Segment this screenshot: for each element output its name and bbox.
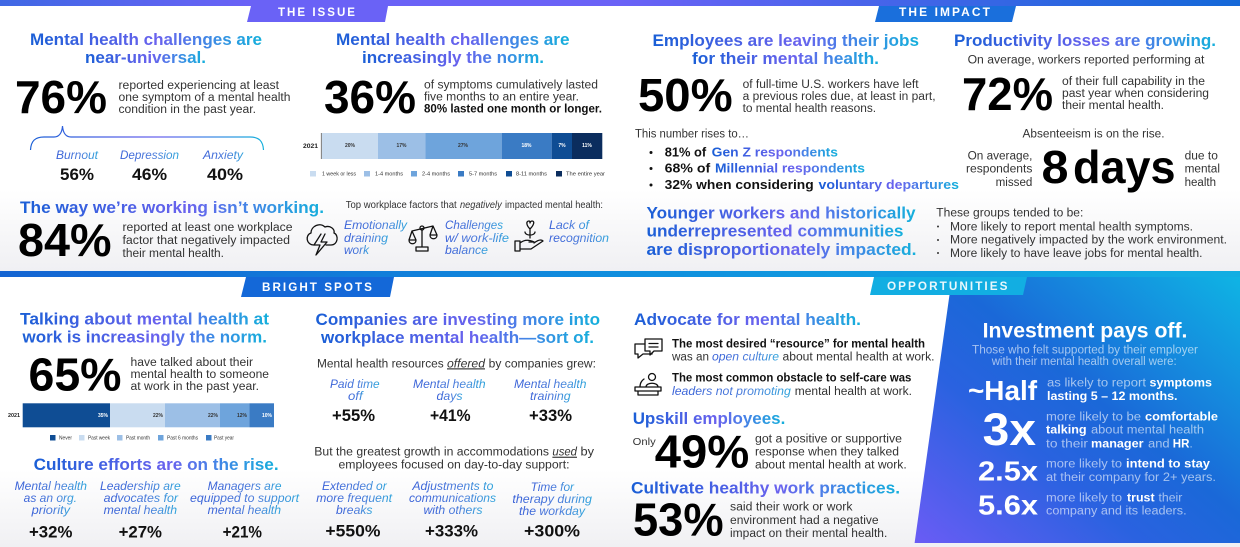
stat: 50% [638, 69, 936, 121]
factor: emotionally draining work: Emotionally [344, 220, 408, 232]
stacked bar chart: talking frequency: 10% [262, 413, 273, 419]
accommodation stat columns: with others [424, 505, 483, 517]
heading: increasingly the norm [336, 30, 570, 67]
stat: 2.5x: 2.5x [978, 456, 1038, 487]
stacked bar chart: talking frequency: Past 6 months [167, 436, 198, 442]
tab: opportunities: OPPORTUNITIES [887, 281, 1010, 293]
stacked bar chart: symptom durations: 11% [582, 143, 592, 149]
heading: companies investing [316, 310, 600, 347]
stat: 76%: one symptom of a mental health [118, 92, 290, 104]
stat: 2.5x: at their company for 2+ years. [1046, 472, 1216, 484]
stat: 72%: of their full capability in the [1062, 76, 1205, 88]
stacked bar chart: talking frequency: 22% [153, 413, 164, 419]
culture stat columns: Managers are [208, 481, 282, 493]
accommodation stat columns: Extended or [322, 481, 388, 493]
stacked bar chart: talking frequency: 2021 [8, 413, 20, 419]
stat: 76%: condition in the past year. [118, 104, 256, 116]
stat: 49%: response when they talked [755, 447, 899, 459]
text: open culture: The most desired “resource” for mental health [672, 338, 925, 350]
factor: emotionally draining work: work [344, 245, 370, 257]
heading: near-universal [30, 30, 262, 67]
heading: upskill: Upskill employees. [633, 409, 785, 428]
heading: talking about mental health [20, 309, 269, 346]
stacked bar chart: talking frequency [8, 403, 274, 442]
tab: the impact: THE IMPACT [899, 7, 992, 19]
text: open culture: about mental health at work. [782, 352, 934, 364]
accommodation stat columns: Time for [531, 482, 575, 494]
symptom breakdown: 46% [132, 166, 167, 184]
symptom breakdown: 40% [207, 166, 243, 184]
factor: lack of recognition: recognition [549, 233, 609, 245]
stat: 84% [18, 214, 292, 266]
stat: 76%: 76% [15, 71, 107, 123]
stat: 5.6x: more likely to [1046, 492, 1122, 504]
stat: 3x: . [1190, 438, 1193, 450]
stat: half: lasting 5 – 12 months. [1047, 391, 1178, 403]
stat: 50%: a previous roles due, at least in part, [743, 91, 936, 103]
stacked bar chart: symptom durations: 17% [396, 143, 407, 149]
heading: talking about mental health: Talking about mental health at [20, 309, 269, 328]
bullet list: demographics: 68% of [665, 161, 711, 176]
symptom breakdown: Anxiety [202, 150, 244, 162]
brace [30, 126, 264, 150]
stat: 72%: past year when considering [1062, 88, 1209, 100]
heading: younger workers [646, 204, 916, 259]
stat: 53%: said their work or work [730, 502, 853, 514]
accommodation stat columns: Adjustments to [411, 481, 494, 493]
tab: the issue [247, 6, 388, 22]
stacked bar chart: symptom durations: 5-7 months [469, 172, 498, 178]
bullet list: group tendencies [936, 208, 1227, 260]
stat: 76%: reported experiencing at least [118, 80, 280, 92]
bullet list: demographics: Gen Z respondents [712, 145, 838, 160]
factor: emotionally draining work [344, 220, 408, 257]
heading: productivity [954, 31, 1216, 66]
stacked bar chart: symptom durations [303, 133, 605, 178]
heading: near-universal: near-universal. [85, 48, 206, 67]
bullet list: group tendencies: More likely to have leave jobs for mental health. [950, 248, 1202, 260]
stacked bar chart: symptom durations: The entire year [566, 172, 605, 178]
stacked bar chart: symptom durations: 8-11 months [516, 172, 548, 178]
culture stat columns: mental health [104, 505, 177, 517]
stacked bar chart: talking frequency: 35% [98, 413, 109, 419]
text: resources offered: offered [447, 358, 486, 370]
symptom breakdown [56, 150, 244, 184]
culture stat columns: as an org. [24, 493, 77, 505]
heading: companies investing: Companies are investing more into [316, 310, 600, 329]
culture stat columns: Mental health [15, 481, 87, 493]
resource stat columns: training [530, 391, 571, 403]
heading: increasingly the norm: Mental health challenges are [336, 30, 570, 49]
stat: 49%: got a positive or supportive [755, 434, 902, 446]
text: accommodations used: But the greatest growth in accommodations [314, 447, 549, 459]
stat: half: ~Half [968, 375, 1038, 406]
bullet list: demographics: 32% when considering [665, 177, 814, 192]
heading: culture efforts: Culture efforts are on the rise. [34, 455, 279, 474]
culture stat columns [15, 481, 300, 542]
stat: 53%: 53% [633, 494, 724, 546]
text: leaders not promoting: The most common obstacle to self-care was [672, 373, 911, 385]
icon: balance scale [409, 226, 437, 251]
stat: 65%: have talked about their [130, 357, 253, 369]
stat: 72% [962, 68, 1209, 120]
resource stat columns: Mental health [514, 379, 586, 391]
stat: 53%: impact on their mental health. [730, 528, 887, 540]
tab: the impact [875, 6, 1016, 22]
heading: productivity: Productivity losses are growing. [954, 31, 1216, 50]
accommodation stat columns: breaks [336, 505, 373, 517]
heading: near-universal: Mental health challenges are [30, 30, 262, 49]
stat: 8 days [966, 141, 1220, 193]
stat: 2.5x: intend to stay [1126, 459, 1211, 471]
heading: talking about mental health: work is increasingly the norm. [22, 327, 267, 346]
panel: investment pays off [870, 277, 1240, 543]
resource stat columns: Paid time [330, 379, 380, 391]
stacked bar chart: symptom durations: 27% [458, 143, 469, 149]
resource stat columns: +41% [430, 407, 471, 425]
stat: half [968, 375, 1212, 406]
text: leaders not promoting [672, 373, 912, 398]
stat: 76% [15, 71, 290, 123]
stat: 36%: 80% lasted one month or longer. [424, 104, 602, 116]
stacked bar chart: symptom durations: 1 week or less [322, 172, 357, 178]
stat: 65%: at work in the past year. [130, 381, 259, 393]
text: leaders not promoting: leaders not promoting [672, 386, 791, 398]
accommodation stat columns: more frequent [316, 493, 393, 505]
text: number rises: This number rises to… [635, 129, 749, 141]
factor: lack of recognition: Lack of [549, 220, 591, 232]
heading: working: The way we’re working isn’t working. [20, 198, 324, 217]
heading: advocate: Advocate for mental health. [634, 310, 861, 329]
factor: challenges with work-life balance: Challenges [445, 220, 503, 232]
factor: challenges with work-life balance: w/ work-life [445, 233, 509, 245]
tab: bright spots [241, 277, 394, 297]
stat: 72%: 72% [962, 68, 1053, 120]
stat: 3x: manager [1091, 438, 1144, 450]
heading: cultivate: Cultivate healthy work practices. [631, 478, 900, 497]
heading: leaving jobs: Employees are leaving their jobs [652, 31, 919, 50]
culture stat columns: priority [30, 505, 71, 517]
stacked bar chart: symptom durations: 2021 [303, 143, 318, 150]
bullet list: group tendencies: These groups tended to be: [936, 208, 1083, 220]
resource stat columns: Mental health [413, 379, 486, 391]
heading: younger workers: underrepresented communities [646, 222, 904, 241]
text: leaders not promoting: mental health at work. [795, 386, 912, 398]
tab: the issue: THE ISSUE [278, 7, 357, 19]
text: top workplace factors: negatively [460, 200, 503, 211]
resource stat columns: +55% [332, 407, 375, 425]
text: top workplace factors: impacted mental health: [505, 200, 603, 211]
text: accommodations used [314, 447, 594, 472]
icon: chat bubbles [635, 339, 662, 358]
text: open culture [671, 338, 934, 364]
panel: bright spots [8, 309, 600, 542]
stacked bar chart: talking frequency: Past month [126, 436, 150, 442]
accommodation stat columns: +300% [524, 523, 580, 541]
accommodation stat columns: +550% [325, 523, 381, 541]
text: accommodations used: by [580, 447, 594, 459]
culture stat columns: +32% [29, 524, 73, 542]
stat: 36%: 36% [324, 71, 416, 123]
stat: 3x: talking [1046, 425, 1087, 437]
accommodation stat columns: +333% [425, 523, 478, 541]
stat: 8 days: due to [1185, 150, 1218, 162]
stat: 5.6x: 5.6x [978, 489, 1038, 520]
text: accommodations used: used [552, 447, 578, 459]
bullet list: demographics: Millennial respondents [715, 161, 865, 176]
stat: half: symptoms [1150, 378, 1212, 390]
text: resources offered [317, 358, 596, 370]
text: top workplace factors [346, 200, 603, 211]
heading: investment pays off: Investment pays off. [983, 320, 1187, 343]
stat: 65%: mental health to someone [130, 369, 269, 381]
heading: younger workers: Younger workers and historically [646, 204, 916, 223]
symptom breakdown: 56% [60, 166, 94, 184]
stat: 8 days: respondents [966, 164, 1033, 176]
text: accommodations used: employees focused on day-to-day support: [338, 460, 570, 472]
heading: leaving jobs [652, 31, 919, 68]
stat: 5.6x: company and its leaders. [1046, 505, 1187, 517]
text: open culture: was an [671, 352, 709, 364]
stacked bar chart: talking frequency: Never [59, 436, 72, 442]
stat: 50%: 50% [638, 69, 733, 121]
stat: 49%: Only [633, 436, 656, 448]
stat: 5.6x: their [1158, 492, 1182, 504]
stat: 49%: 49% [655, 426, 749, 478]
resource stat columns [330, 379, 586, 425]
stacked bar chart: symptom durations: 7% [558, 143, 566, 149]
text: resources offered: Mental health resources [317, 358, 444, 370]
text: supported employees: with their mental health overall were: [991, 356, 1177, 368]
text: absenteeism: Absenteeism is on the rise. [1022, 129, 1164, 141]
culture stat columns: +27% [119, 524, 162, 542]
text: resources offered: by companies grew: [489, 358, 596, 370]
stat: 84%: their mental health. [122, 248, 224, 260]
stat: 3x: HR [1173, 438, 1190, 450]
culture stat columns: mental health [208, 505, 281, 517]
stat: 5.6x [978, 489, 1187, 520]
accommodation stat columns: the workday [519, 506, 586, 518]
stat: 5.6x: trust [1127, 492, 1155, 504]
bullet list: demographics [650, 145, 959, 192]
symptom breakdown: Burnout [56, 150, 99, 162]
stat: 49%: about mental health at work. [755, 460, 907, 472]
heading: increasingly the norm: increasingly the norm. [362, 48, 544, 67]
stacked bar chart: symptom durations: 2-4 months [422, 172, 451, 178]
accommodation stat columns: communications [409, 493, 496, 505]
icon: hand with heart [515, 221, 543, 251]
stat: 3x: comfortable [1145, 412, 1218, 424]
stat: 84%: factor that negatively impacted [122, 235, 290, 247]
heading: younger workers: are disproportionately impacted. [646, 240, 916, 259]
accommodation stat columns [316, 481, 593, 541]
bullet list: demographics: voluntary departures [818, 177, 959, 192]
culture stat columns: advocates for [104, 493, 179, 505]
stat: 8 days: 8 [1042, 141, 1068, 193]
bullet list: group tendencies: More negatively impacted by the work environment. [950, 235, 1227, 247]
icon: leader at podium [635, 374, 661, 395]
stacked bar chart: talking frequency: 12% [237, 413, 248, 419]
tab: bright spots: BRIGHT SPOTS [262, 282, 374, 294]
stat: 36% [324, 71, 602, 123]
stat: 65%: 65% [28, 349, 122, 401]
text: open culture: open culture [712, 352, 779, 364]
text: supported employees: Those who felt supported by their employer [972, 344, 1198, 356]
stat: 3x: about mental health [1091, 425, 1204, 437]
stat: 2.5x [978, 456, 1216, 487]
stacked bar chart: talking frequency: 22% [208, 413, 219, 419]
panel: opportunities [631, 310, 934, 546]
stat: 65% [28, 349, 269, 401]
tab: opportunities [870, 277, 1027, 295]
stat: 8 days: missed [996, 177, 1032, 189]
stat: 8 days: On average, [968, 150, 1032, 162]
stat: 8 days: days [1073, 141, 1176, 193]
stat: 84%: reported at least one workplace [122, 222, 292, 234]
culture stat columns: +21% [223, 524, 262, 542]
bullet list: demographics: 81% of [665, 145, 707, 160]
stat: 3x: to their [1046, 438, 1088, 450]
culture stat columns: Leadership are [100, 481, 181, 493]
stat: 3x: 3x [983, 404, 1036, 455]
stacked bar chart: symptom durations: 20% [345, 143, 356, 149]
stacked bar chart: symptom durations: 18% [521, 143, 532, 149]
stat: 53%: environment had a negative [730, 515, 879, 527]
stat: half: as likely to report [1047, 378, 1147, 390]
stat: 2.5x: more likely to [1046, 459, 1122, 471]
stat: 50%: to mental health reasons. [743, 103, 876, 115]
stat: 3x [983, 404, 1218, 455]
symptom breakdown: Depression [120, 150, 179, 162]
resource stat columns: days [436, 391, 463, 403]
accommodation stat columns: therapy during [512, 494, 593, 506]
text: top workplace factors: Top workplace factors that [346, 200, 457, 211]
resource stat columns: off [348, 391, 365, 403]
stacked bar chart: symptom durations: 1-4 months [375, 172, 404, 178]
stacked bar chart: talking frequency: Past year [214, 436, 234, 442]
stat: 84%: 84% [18, 214, 112, 266]
stat: 3x: and [1148, 438, 1170, 450]
stat: 72%: their mental health. [1062, 100, 1164, 112]
stat: 50%: of full-time U.S. workers have left [743, 79, 919, 91]
stat: 8 days: mental [1185, 164, 1220, 176]
bullet list: group tendencies: More likely to report mental health symptoms. [950, 221, 1193, 233]
panel: the issue [15, 30, 609, 266]
factor: challenges with work-life balance: balance [445, 245, 488, 257]
panel: the impact [635, 31, 1227, 260]
stat: 8 days: health [1185, 177, 1216, 189]
icon: storm cloud [307, 225, 337, 255]
heading: leaving jobs: for their mental health. [692, 49, 879, 68]
resource stat columns: +33% [529, 407, 572, 425]
factor: lack of recognition [549, 220, 609, 245]
stat: 3x: more likely to be [1046, 412, 1141, 424]
factor: challenges with work-life balance [445, 220, 509, 257]
heading: companies investing: workplace mental health—sort of. [320, 328, 594, 347]
stacked bar chart: talking frequency: Past week [88, 436, 110, 442]
text: supported employees [972, 344, 1198, 368]
stat: 36%: of symptoms cumulatively lasted [424, 80, 598, 92]
stat: 36%: five months to an entire year. [424, 92, 579, 104]
heading: productivity: On average, workers reported performing at [968, 54, 1205, 66]
culture stat columns: equipped to support [190, 493, 300, 505]
factor: emotionally draining work: draining [344, 233, 389, 245]
stat: 53% [633, 494, 887, 546]
stat: 49% [633, 426, 907, 478]
